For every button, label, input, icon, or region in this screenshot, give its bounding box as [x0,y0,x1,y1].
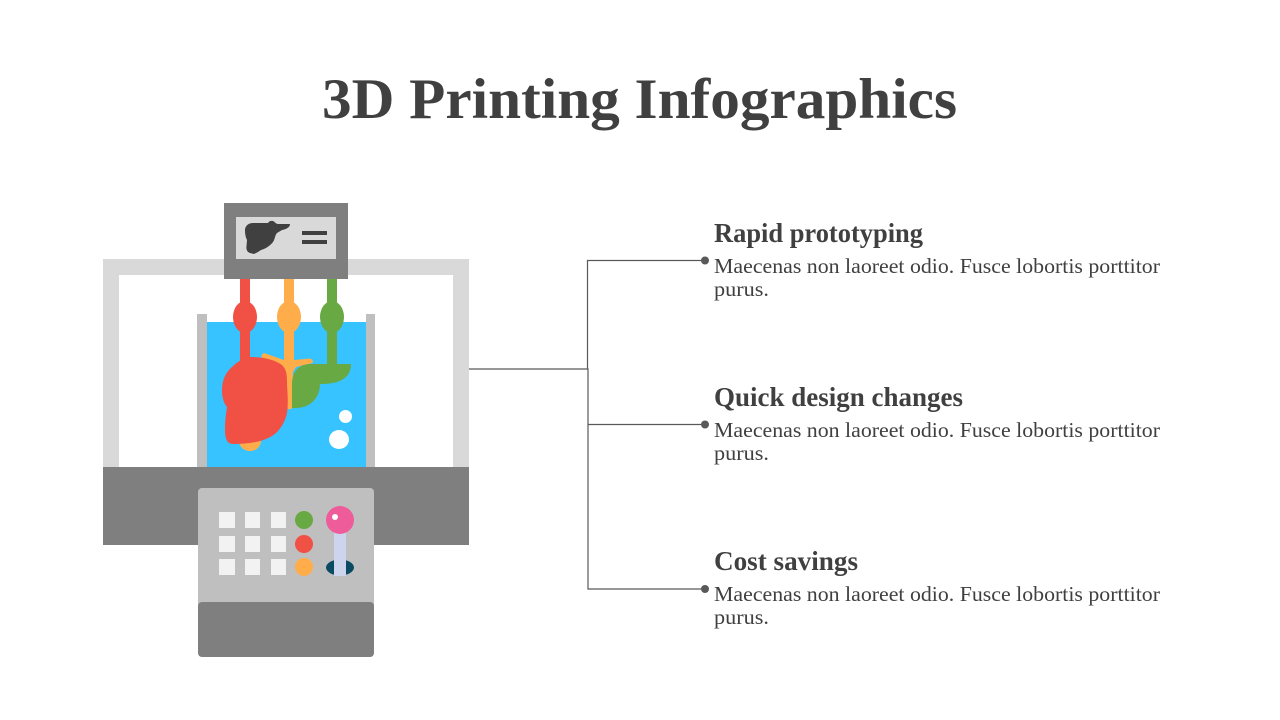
resin tank [207,322,366,467]
control panel lower block [198,602,374,657]
description: purus. [714,277,769,301]
orange nozzle and printed part [239,279,313,451]
heading: Cost savings [714,546,858,576]
tank walls [197,314,375,467]
heading: Quick design changes [714,382,963,412]
description: purus. [714,441,769,465]
heading: Rapid prototyping [714,218,923,248]
bubbles [329,410,352,449]
description: Maecenas non laoreet odio. Fusce lobortis porttitor [714,582,1160,606]
keypad [219,512,286,575]
description [714,582,1160,629]
item: cost savings [714,546,1160,629]
illustration: 3D printer [103,203,469,657]
item: quick design changes [714,382,1160,465]
green printed part [292,364,351,408]
description: Maecenas non laoreet odio. Fusce lobortis porttitor [714,254,1160,278]
printer frame [103,259,469,467]
display screen [236,217,336,259]
description [714,418,1160,465]
red nozzle [233,279,257,369]
description: purus. [714,605,769,629]
title: 3D Printing Infographics [322,68,957,131]
green nozzle [320,279,344,369]
item: rapid prototyping [714,218,1160,301]
connector dots [701,256,709,593]
printer base [103,467,469,545]
icon: equals bars [302,231,327,244]
connector lines [469,256,709,593]
description: Maecenas non laoreet odio. Fusce lobortis porttitor [714,418,1160,442]
red printed liver [222,357,288,444]
description [714,254,1160,301]
status lights [295,511,313,576]
control panel [198,488,374,613]
icon: liver on screen [245,221,290,254]
display housing [224,203,348,279]
joystick [326,506,354,576]
